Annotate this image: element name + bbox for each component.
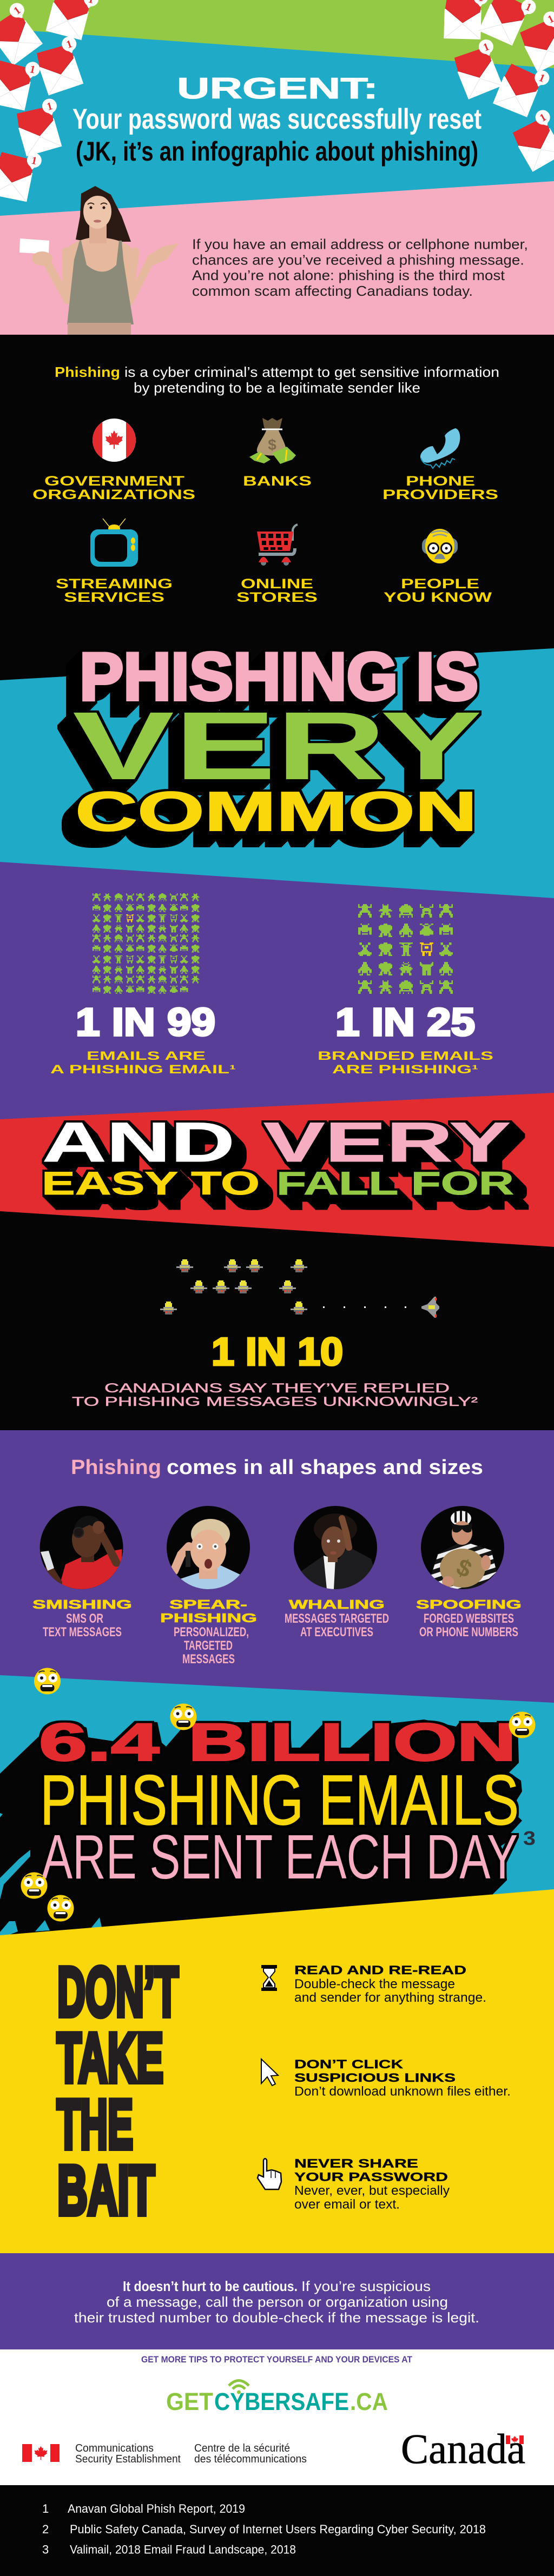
headline: and very easy to fall for: FALL FOR [276, 1165, 514, 1201]
logo: Communications Security Establishment: Communications [75, 2442, 154, 2454]
pictogram: 1 in 25 space invaders [358, 904, 453, 994]
intro paragraph: If you have an email address or cellphone number, [192, 236, 528, 252]
stat: 1 in 10 [72, 1330, 478, 1409]
phishing type labels: OR PHONE NUMBERS [419, 1625, 518, 1639]
footnotes: Valimail, 2018 Email Fraud Landscape, 2018 [70, 2542, 296, 2557]
organization labels: PEOPLE [401, 577, 479, 592]
tip: never share your password: NEVER SHARE [294, 2157, 418, 2170]
stat shadow: black burst behind 6.4 billion [0, 1719, 554, 2576]
icon: telephone [420, 428, 460, 468]
pictogram: 1 in 99 space invaders [93, 893, 199, 993]
footnotes: 3 [42, 2542, 49, 2557]
organization labels: SERVICES [64, 590, 164, 605]
stats: 1 in 99 and 1 in 25: ARE PHISHING¹ [332, 1063, 478, 1076]
heading: don't take the bait: TAKE [57, 2019, 163, 2097]
icons: envelopes, left cluster [0, 0, 100, 203]
logo: Communications Security Establishment: Centre de la sécurité [194, 2442, 290, 2454]
definition text: is a cyber criminal’s attempt to get sensitive information [124, 364, 499, 380]
headline: phishing is very common: VERY [72, 692, 482, 800]
icons: envelopes, left cluster: 1 [11, 4, 23, 17]
icons: envelopes, left cluster: 1 [30, 155, 38, 167]
callout: be cautious: of a message, call the person or organization using [107, 2294, 448, 2310]
tip: read and re-read: and sender for anything strange. [294, 1990, 486, 2005]
icons: envelopes, left cluster: 1 [45, 100, 54, 113]
phishing type labels: SMS OR [66, 1611, 103, 1626]
stats: 1 in 99 and 1 in 25 [50, 1001, 493, 1076]
phishing type labels: SPEAR- [169, 1597, 247, 1611]
footnotes: Anavan Global Phish Report, 2019 [68, 2502, 245, 2515]
headline: and very easy to fall for: VERY [263, 1111, 511, 1174]
organization labels: BANKS [243, 474, 312, 489]
footnotes: 2 [42, 2522, 49, 2536]
tip: read and re-read: Double-check the message [294, 1977, 455, 1991]
phishing type labels: WHALING [289, 1597, 385, 1611]
icon: television [90, 519, 138, 567]
organization labels: PHONE [406, 474, 475, 489]
tip: read and re-read [294, 1963, 486, 2005]
icons: envelopes, right cluster: 1 [482, 41, 491, 54]
definition text [55, 364, 499, 396]
definition text: by pretending to be a legitimate sender like [134, 380, 420, 396]
organization labels: STREAMING [56, 577, 173, 592]
pictogram: alien ships [160, 1259, 307, 1314]
phishing type labels: MESSAGES TARGETED [285, 1611, 389, 1626]
logo: Communications Security Establishment: des télécommunications [194, 2453, 307, 2465]
logo: Communications Security Establishment: Security Establishment [75, 2453, 181, 2465]
heading: don't take the bait: THE [57, 2086, 133, 2163]
icons: envelopes, right cluster: 1 [538, 111, 548, 124]
headline: and very easy to fall for: AND [42, 1111, 235, 1174]
photo circle: man reading phone [40, 1506, 123, 1589]
icons: envelopes, left cluster: 1 [29, 63, 36, 76]
tip: never share your password: Never, ever, but especially [294, 2183, 450, 2198]
heading: shapes and sizes: comes in all shapes and sizes [167, 1456, 483, 1479]
phishing type labels: SMISHING [32, 1597, 132, 1611]
phishing type labels: PERSONALIZED, [174, 1625, 249, 1639]
title: URGENT: [177, 71, 378, 105]
background colour bands [0, 0, 554, 1947]
photo circle: shocked woman on phone [167, 1506, 250, 1589]
headline: and very easy to fall for [42, 1111, 514, 1201]
illustration: woman shrugging with phone [19, 186, 179, 335]
stats: 1 in 99 and 1 in 25: BRANDED EMAILS [318, 1049, 493, 1063]
stat: 1 in 10: 1 IN 10 [212, 1330, 343, 1373]
phishing type labels: AT EXECUTIVES [300, 1625, 373, 1639]
organization labels: PROVIDERS [382, 488, 498, 502]
tip: don't click suspicious links: SUSPICIOUS LINKS [294, 2071, 456, 2084]
footnotes [42, 2502, 486, 2557]
phishing type labels: FORGED WEBSITES [424, 1611, 514, 1626]
logo: Communications Security Establishment [22, 2442, 307, 2465]
definition text: Phishing [55, 364, 120, 380]
headline: phishing is very common [72, 640, 482, 842]
intro paragraph: chances are you’ve received a phishing message. [192, 252, 524, 268]
call to action: GET MORE TIPS TO PROTECT YOURSELF AND YOUR DEVICES AT [141, 2354, 413, 2365]
icon: pointing hand cursor [258, 2159, 281, 2189]
icon: Canadian flag circle [93, 419, 136, 462]
tip: don't click suspicious links: DON’T CLICK [294, 2057, 404, 2071]
tip: don't click suspicious links [294, 2057, 511, 2099]
stat: 1 in 10: TO PHISHING MESSAGES UNKNOWINGLY² [72, 1395, 478, 1409]
tip: never share your password [294, 2157, 450, 2212]
organization labels: ONLINE [241, 577, 313, 592]
footnotes: Public Safety Canada, Survey of Internet Users Regarding Cyber Security, 2018 [70, 2522, 486, 2536]
organization labels: YOU KNOW [384, 590, 492, 605]
photo circle: burglar with money sack [421, 1506, 504, 1589]
logo: getcybersafe.ca [166, 2380, 388, 2415]
icons: shocked emoji faces [21, 1668, 536, 1922]
photo circle: burglar with money sack: $ [452, 1553, 476, 1583]
stat: 6.4 billion phishing emails: BILLION [188, 1712, 516, 1771]
phishing type labels: SPOOFING [416, 1597, 522, 1611]
callout: be cautious: If you’re suspicious [301, 2278, 431, 2294]
callout: be cautious [74, 2278, 479, 2326]
icon: shopping cart [257, 525, 298, 566]
tip: never share your password: over email or text. [294, 2197, 400, 2212]
stats: 1 in 99 and 1 in 25: 1 IN 25 [335, 1001, 475, 1044]
tip: don't click suspicious links: Don’t download unknown files either. [294, 2084, 511, 2099]
phishing type labels: PHISHING [160, 1611, 257, 1625]
stat: 1 in 10: CANADIANS SAY THEY’VE REPLIED [104, 1382, 450, 1396]
pictogram: shooter ship and shots [323, 1297, 439, 1318]
organization labels: ORGANIZATIONS [32, 488, 195, 502]
tip: read and re-read: READ AND RE-READ [294, 1963, 466, 1977]
intro paragraph: common scam affecting Canadians today. [192, 283, 473, 299]
stats: 1 in 99 and 1 in 25: 1 IN 99 [76, 1001, 215, 1044]
logo: getcybersafe.ca: CYBERSAFE [214, 2388, 349, 2415]
organization labels: GOVERNMENT [44, 474, 184, 489]
callout: be cautious: their trusted number to double-check if the message is legit. [74, 2309, 479, 2326]
phishing type labels: TEXT MESSAGES [43, 1625, 122, 1639]
heading: don't take the bait: DON’T [57, 1953, 179, 2031]
icons: envelopes, right cluster: 1 [524, 1, 533, 14]
icons: envelopes, left cluster: 1 [65, 38, 74, 51]
icons: envelopes, right cluster [444, 0, 554, 172]
stat: 6.4 billion phishing emails: 6.4 [39, 1712, 159, 1771]
logo: getcybersafe.ca: .CA [350, 2388, 388, 2415]
footnotes: 1 [42, 2502, 49, 2515]
stat: 6.4 billion phishing emails: 3 [523, 1827, 536, 1849]
icon: old man face with glasses [422, 529, 458, 563]
organization labels: STORES [236, 590, 318, 605]
logo: Canada wordmark: Canada [401, 2425, 525, 2472]
stats: 1 in 99 and 1 in 25: EMAILS ARE [87, 1049, 206, 1063]
headline: phishing is very common: PHISHING IS [80, 640, 478, 714]
phishing type labels: MESSAGES [182, 1652, 235, 1667]
icon: mouse cursor [261, 2059, 278, 2086]
headline: phishing is very common: COMMON [75, 780, 477, 842]
logo: getcybersafe.ca: GET [166, 2388, 213, 2415]
intro paragraph [192, 236, 528, 299]
heading: don't take the bait [57, 1953, 179, 2229]
icon: money bag [249, 418, 296, 464]
stat: 6.4 billion phishing emails [39, 1712, 536, 1892]
callout: be cautious: It doesn’t hurt to be cautious. [123, 2278, 298, 2294]
intro paragraph: And you’re not alone: phishing is the third most [192, 267, 505, 283]
phishing type labels: TARGETED [184, 1638, 233, 1653]
headline: and very easy to fall for: EASY TO [42, 1165, 260, 1201]
photo circle: stressed executive [294, 1506, 377, 1589]
icon: hourglass [261, 1965, 277, 1991]
title [72, 71, 482, 167]
tip: never share your password: YOUR PASSWORD [294, 2170, 448, 2183]
icons: envelopes, right cluster: 1 [537, 72, 546, 85]
stats: 1 in 99 and 1 in 25: A PHISHING EMAIL¹ [50, 1063, 236, 1076]
heading: shapes and sizes: Phishing [71, 1456, 161, 1479]
phishing type labels [32, 1597, 522, 1667]
heading: don't take the bait: BAIT [57, 2152, 155, 2229]
organization labels [32, 474, 498, 605]
icon: money bag: $ [268, 436, 276, 453]
